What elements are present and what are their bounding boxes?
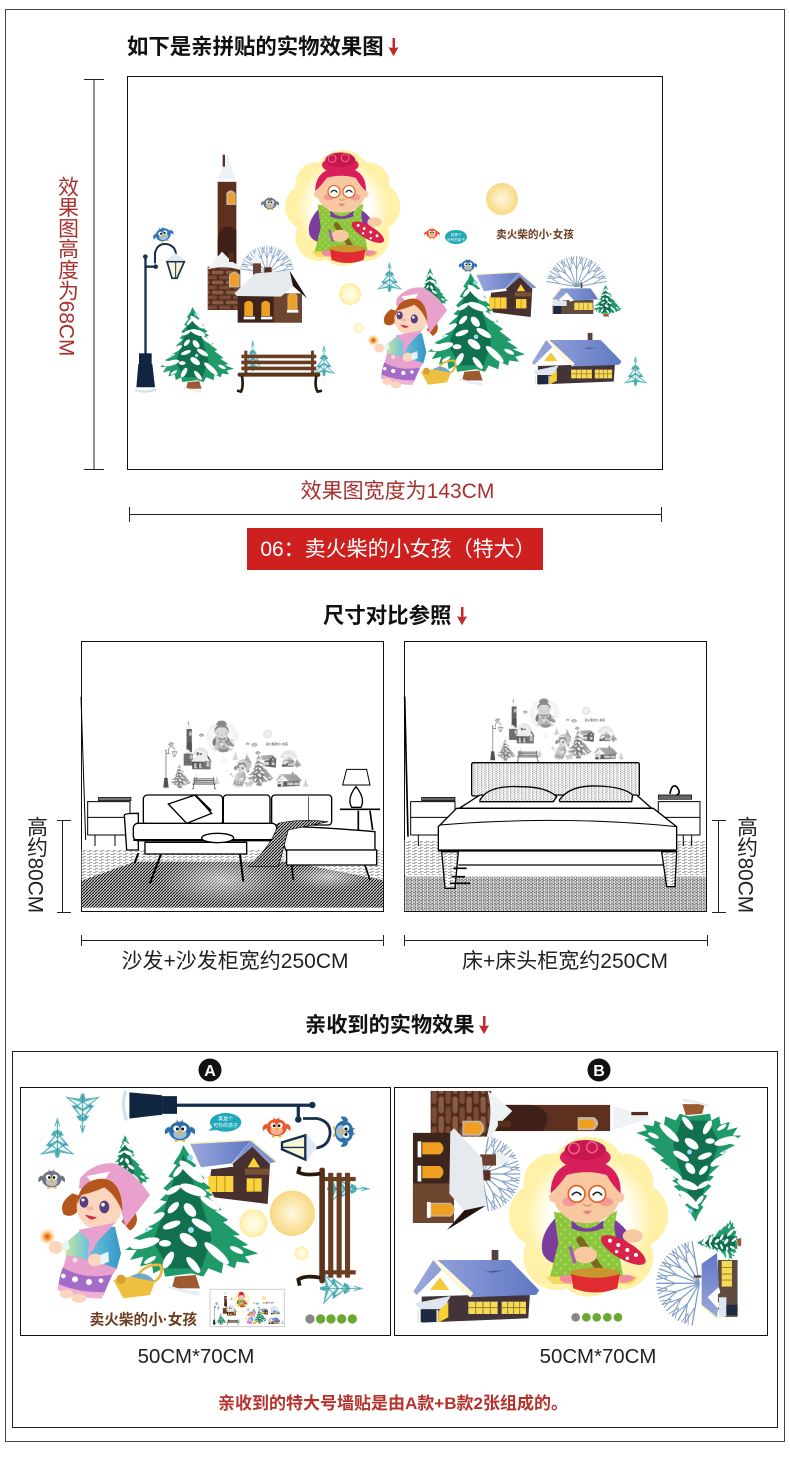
badge B [588,1058,610,1082]
icon: red down arrow [457,607,467,625]
sheet A size label: 50CM*70CM [138,1346,254,1368]
badge B: B [593,1063,605,1080]
left height label: 高约80CM [24,816,48,913]
width label: 效果图宽度为143CM [301,480,494,503]
sofa width dimension [81,935,384,973]
right height dimension [712,816,758,913]
bed line art [405,697,706,911]
heading: size comparison: 尺寸对比参照 [323,603,451,628]
red footnote: 亲收到的特大号墙贴是由A款+B款2张组成的。 [218,1393,568,1413]
bed width label: 床+床头柜宽约250CM [462,950,668,973]
panel: received sheets outer frame [12,1052,778,1428]
sheet A title: 卖火柴的小·女孩 [90,1310,197,1328]
heading: received product: 亲收到的实物效果 [305,1012,475,1037]
speech bubble [208,1113,241,1132]
height dimension [54,80,104,470]
heading: real effect: 如下是亲拼贴的实物效果图 [127,34,384,59]
height label: 效果图高度为68CM [54,176,79,356]
icon: red down arrow [388,38,398,56]
panel: assembled sticker scene [128,76,662,470]
miniature preview [210,1289,284,1327]
panel: sheet A [20,1088,390,1336]
red title banner: 06：卖火柴的小女孩（特大） [260,538,536,561]
panel: sheet B [394,1088,768,1336]
certification icons [305,1314,357,1324]
badge A: A [204,1063,216,1080]
panel: sofa mockup [81,642,384,912]
right height label: 高约80CM [734,816,758,913]
certification icons [571,1313,622,1322]
speech bubble: 可怜的孩子 [213,1122,238,1129]
sofa width label: 沙发+沙发柜宽约250CM [122,950,348,973]
icon: red down arrow [479,1016,489,1034]
bed width dimension [404,935,708,973]
sheet B size label: 50CM*70CM [540,1346,656,1368]
speech bubble: 真是个 [218,1116,233,1123]
left height dimension [24,816,71,913]
panel: bed mockup [404,642,706,912]
sofa line art [81,697,383,908]
width dimension [129,480,662,522]
badge A [198,1058,222,1082]
red title banner [247,528,543,570]
